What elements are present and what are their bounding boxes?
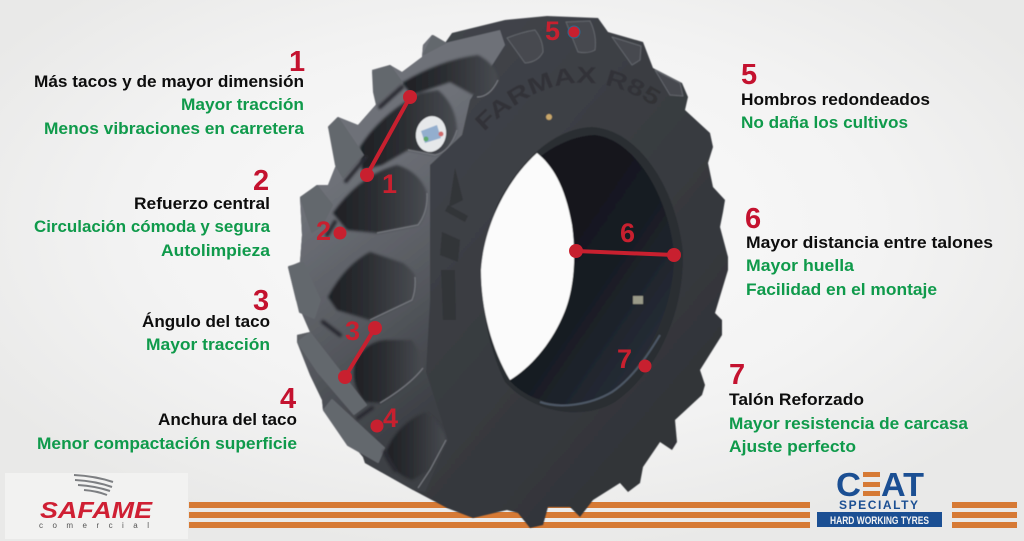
- callout 5: Hombros redondeados: [741, 90, 930, 109]
- callout 7: [729, 359, 969, 456]
- callout 1: Mayor tracción: [181, 95, 304, 114]
- callout 6: Mayor distancia entre talones: [746, 233, 993, 252]
- bead highlight: [540, 335, 660, 405]
- logo: CEAT Specialty: C: [836, 466, 861, 503]
- marker 7: [617, 344, 652, 374]
- marker 3: [338, 316, 382, 384]
- logo wing: [74, 475, 113, 495]
- marker 4: [370, 403, 398, 433]
- valve: [546, 114, 552, 120]
- logo: CEAT Specialty: [817, 466, 942, 527]
- callout 6: 6: [745, 203, 761, 235]
- marker 5: [545, 16, 580, 46]
- callout 3: [142, 285, 270, 354]
- inner rim ring: [483, 127, 683, 412]
- callout 3: Mayor tracción: [146, 335, 270, 354]
- pocket rims: [370, 80, 498, 488]
- tread lugs: [289, 36, 445, 462]
- callout 5: [741, 59, 930, 132]
- interior tag: [633, 296, 643, 304]
- callout 2: Circulación cómoda y segura: [34, 217, 271, 236]
- marker 2: 2: [316, 216, 331, 246]
- callout 6: [745, 203, 993, 299]
- logo orange E bars: [863, 472, 880, 496]
- tyre silhouette: [288, 16, 728, 528]
- callout 2: Refuerzo central: [134, 194, 270, 213]
- callout 4: 4: [280, 383, 296, 415]
- callout 5: 5: [741, 59, 757, 91]
- callout 7: Mayor resistencia de carcasa: [729, 414, 969, 433]
- callout 3: Ángulo del taco: [142, 312, 270, 331]
- tyre photo: [287, 15, 729, 529]
- logo: Safame Comercial: SAFAME: [40, 497, 153, 523]
- callout 5: No daña los cultivos: [741, 113, 908, 132]
- sticker colours: [421, 125, 444, 143]
- lug crevices: [323, 87, 402, 470]
- upper lug panels: [507, 21, 683, 96]
- orange stripes: [189, 502, 1017, 528]
- callout 7: Talón Reforzado: [729, 390, 864, 409]
- callout 4: Anchura del taco: [158, 410, 297, 429]
- marker 7: 7: [617, 344, 632, 374]
- logo: Safame Comercial: comercial: [39, 521, 149, 530]
- callout 1: [34, 46, 305, 138]
- callout 2: [34, 165, 271, 260]
- logo: CEAT Specialty: SPECIALTY: [839, 498, 918, 512]
- callout 7: 7: [729, 359, 745, 391]
- marker 3: 3: [345, 316, 360, 346]
- callout 4: [37, 383, 297, 453]
- marker 6: 6: [620, 218, 635, 248]
- logo: Safame Comercial: [5, 473, 188, 539]
- callout 1: 1: [289, 46, 305, 78]
- callout 7: Ajuste perfecto: [729, 437, 856, 456]
- logo: CEAT Specialty: AT: [881, 466, 924, 503]
- callout 3: 3: [253, 285, 269, 317]
- callout 6: Mayor huella: [746, 256, 855, 275]
- callout 6: Facilidad en el montaje: [746, 280, 937, 299]
- sidewall label sticker: [413, 113, 449, 155]
- marker 2: [316, 216, 346, 246]
- marker 1: 1: [382, 169, 397, 199]
- callout 2: 2: [253, 165, 269, 197]
- logo: CEAT Specialty: HARD WORKING TYRES: [830, 515, 929, 527]
- callout 1: Menos vibraciones en carretera: [44, 119, 305, 138]
- tyre interior: [490, 135, 674, 405]
- callout 1: Más tacos y de mayor dimensión: [34, 72, 304, 91]
- sidewall chevrons: [440, 168, 468, 320]
- callout 4: Menor compactación superficie: [37, 434, 297, 453]
- sidewall lettering: FARMAX R85: [475, 67, 660, 130]
- marker 4: 4: [383, 403, 398, 433]
- marker 6: [569, 218, 681, 262]
- marker 5: 5: [545, 16, 560, 46]
- tread pockets: [328, 55, 498, 480]
- marker 1: [360, 90, 417, 199]
- callout 2: Autolimpieza: [161, 241, 271, 260]
- white opening: [481, 153, 574, 380]
- shoulder band of tread: [288, 30, 505, 492]
